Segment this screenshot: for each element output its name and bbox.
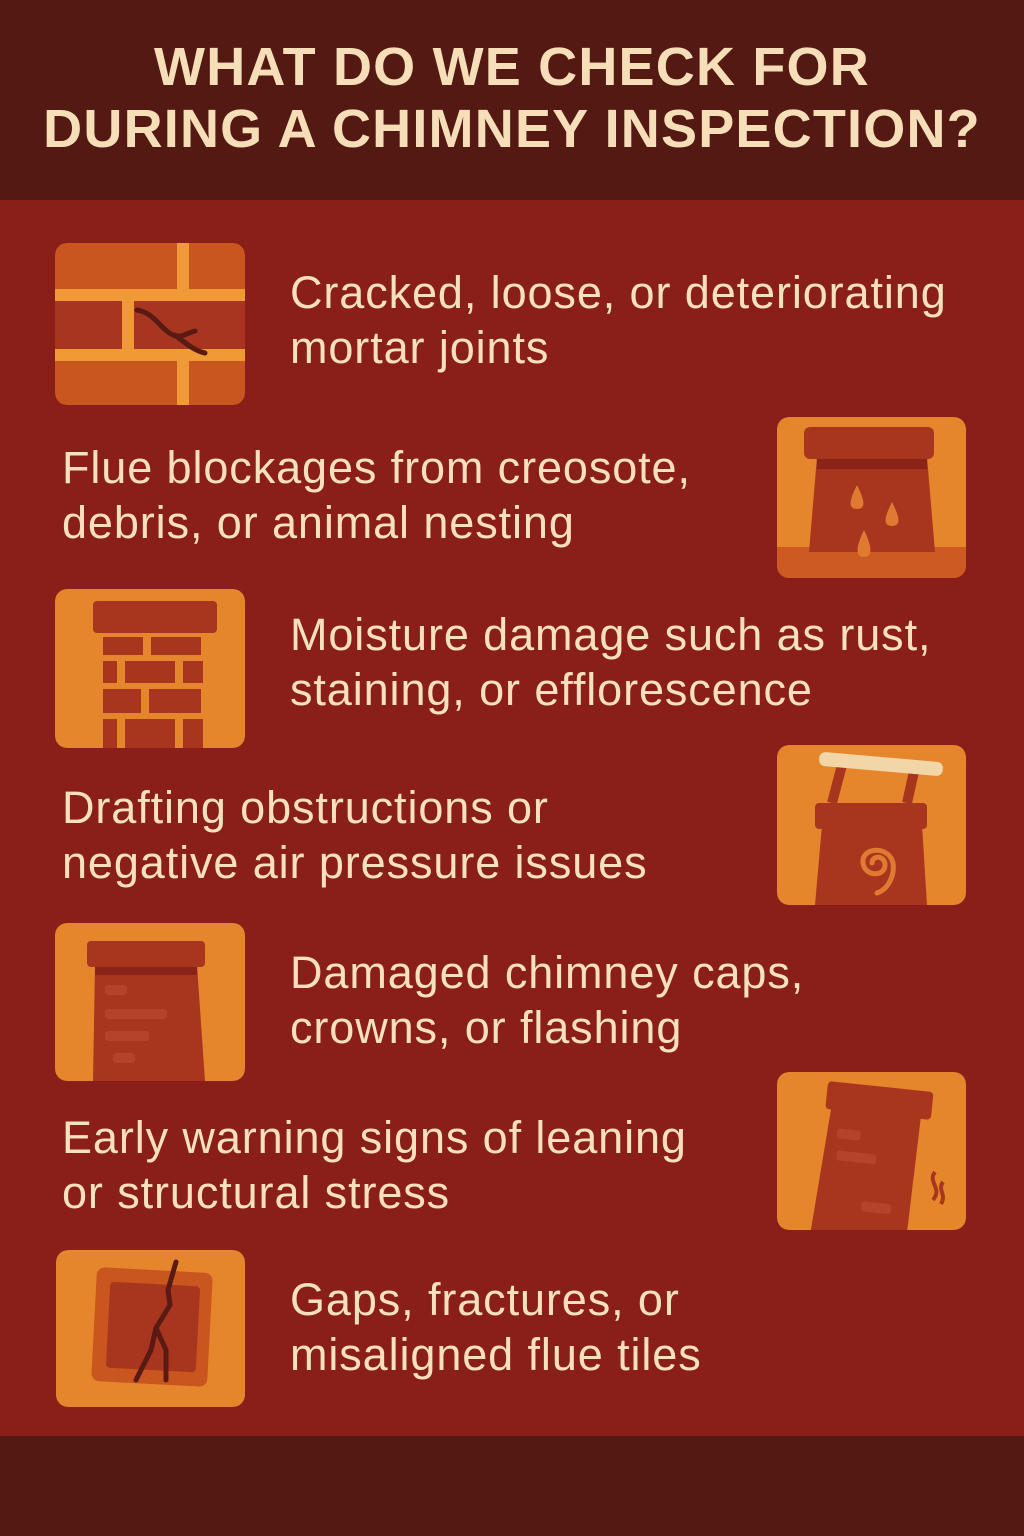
text: caps crowns: crowns, or flashing bbox=[290, 1002, 682, 1053]
text: flue tiles: misaligned flue tiles bbox=[290, 1329, 702, 1380]
icon: chimney bricks bbox=[55, 589, 245, 748]
text: drafting: negative air pressure issues bbox=[62, 837, 647, 888]
header band bbox=[0, 0, 1024, 200]
text: moisture damage: Moisture damage such as rust, bbox=[290, 609, 931, 660]
text: mortar joints: mortar joints bbox=[290, 322, 549, 373]
icon: brick wall crack bbox=[55, 243, 245, 405]
text: leaning bbox=[62, 1112, 687, 1218]
title bbox=[43, 37, 981, 159]
text: mortar joints: Cracked, loose, or deteriorating bbox=[290, 267, 947, 318]
text: leaning: or structural stress bbox=[62, 1167, 450, 1218]
icon: flue with drops bbox=[777, 417, 966, 578]
title: WHAT DO WE CHECK FOR bbox=[154, 37, 870, 97]
text: flue blockages bbox=[62, 442, 691, 548]
text: flue tiles bbox=[290, 1274, 702, 1380]
text: caps crowns bbox=[290, 947, 804, 1053]
icon: leaning chimney bbox=[777, 1072, 966, 1230]
text: drafting bbox=[62, 782, 647, 888]
text: moisture damage bbox=[290, 609, 931, 715]
text: moisture damage: staining, or efflorescence bbox=[290, 664, 813, 715]
text: mortar joints bbox=[290, 267, 947, 373]
text: flue blockages: Flue blockages from creosote, bbox=[62, 442, 691, 493]
icon: cracked flue tile bbox=[56, 1250, 245, 1407]
text: caps crowns: Damaged chimney caps, bbox=[290, 947, 804, 998]
icon: chimney cap bbox=[55, 923, 245, 1081]
title: DURING A CHIMNEY INSPECTION? bbox=[43, 99, 981, 159]
text: flue tiles: Gaps, fractures, or bbox=[290, 1274, 680, 1325]
text: drafting: Drafting obstructions or bbox=[62, 782, 549, 833]
text: flue blockages: debris, or animal nesting bbox=[62, 497, 575, 548]
footer band bbox=[0, 1436, 1024, 1536]
icon: chimney swirl bbox=[777, 745, 966, 905]
text: leaning: Early warning signs of leaning bbox=[62, 1112, 687, 1163]
